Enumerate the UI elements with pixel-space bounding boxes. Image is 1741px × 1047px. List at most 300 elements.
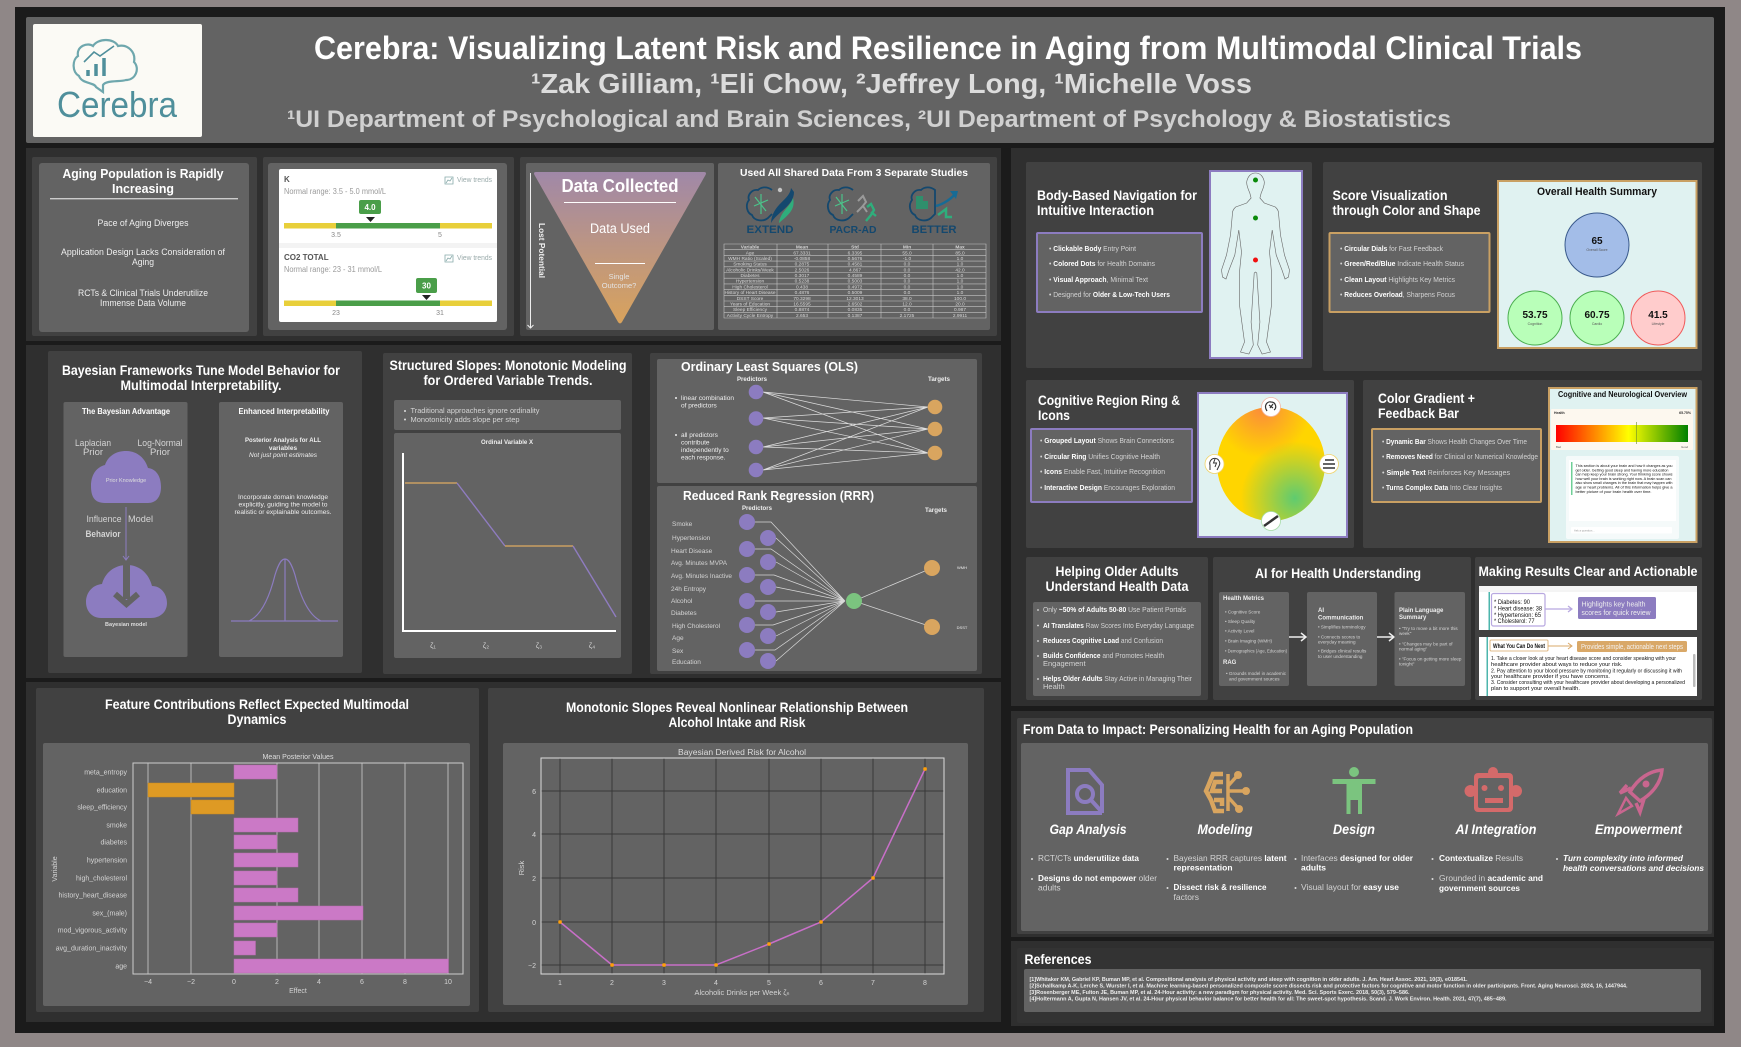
subpanel: Bayesian advantage: Prior	[150, 447, 170, 458]
text block: Immense Data Volume	[100, 298, 186, 308]
text block: Helps Older Adults Stay Active in Managing Their	[1043, 674, 1192, 683]
panel: body navigation: Intuitive Interaction	[1037, 202, 1154, 218]
data table: Mean	[796, 245, 808, 251]
data table: 2.653	[796, 313, 808, 319]
line chart: 3	[662, 980, 666, 987]
text block: Builds Confidence and Promotes Health	[1043, 651, 1164, 660]
column: empowerment: Turn complexity into informed	[1563, 853, 1684, 863]
subpanel: RRR: WMH	[957, 565, 967, 570]
data table: 55.0	[902, 250, 912, 256]
data table: 12.3013	[846, 296, 864, 302]
bar chart: sex_(male)	[92, 910, 127, 918]
data table: 0.5676	[848, 256, 863, 262]
bar chart: smoke	[106, 822, 127, 830]
data table: Age	[746, 250, 755, 256]
data table: 42.0	[955, 267, 965, 273]
subpanel: Bayesian advantage: Log-Normal	[138, 438, 182, 449]
text block: • Grouped Layout Shows Brain Connections	[1040, 436, 1174, 445]
bar chart: 6	[360, 979, 364, 986]
column: modeling	[1166, 771, 1287, 902]
column: modeling: Dissect risk & resilience	[1174, 882, 1267, 892]
data table: 0.5009	[848, 290, 863, 296]
heading: Bayesian Frameworks Tune Model Behavior for	[62, 362, 340, 378]
box: AI communication: to user understanding	[1318, 654, 1363, 659]
subpanel: RRR: Age	[672, 635, 684, 642]
dials: overall health summary: 65	[1591, 236, 1603, 247]
icon: rocket	[1618, 770, 1662, 814]
data table: 0.0	[904, 290, 911, 296]
panel: body navigation	[1026, 162, 1312, 368]
funnel: Single	[609, 272, 629, 281]
text block: • Simple Text Reinforces Key Messages	[1382, 468, 1510, 477]
panel: AI understanding: AI for Health Understanding	[1255, 565, 1421, 581]
panel: structured slopes: for Ordered Variable Trends.	[424, 372, 592, 388]
column: gap analysis: Gap Analysis	[1050, 821, 1127, 837]
card: key scores: * Cholesterol: 77	[1494, 618, 1535, 625]
dials: overall health summary	[1498, 181, 1696, 348]
data table: 38.0	[902, 296, 912, 302]
data table: History of Heart Disease	[724, 290, 776, 296]
logo: BETTER	[910, 187, 958, 236]
panel: feature contributions	[36, 688, 479, 1012]
column: empowerment: Empowerment	[1595, 821, 1683, 837]
line chart: 0	[532, 920, 536, 927]
column: AI integration: government sources	[1439, 883, 1520, 893]
box: health metrics: RAG	[1223, 660, 1237, 666]
line chart: Alcoholic Drinks per Week ζₙ	[694, 988, 790, 997]
text block: Application Design Lacks Consideration of	[61, 247, 225, 257]
studies and table	[718, 163, 990, 330]
subpanel: OLS: each response.	[681, 454, 726, 462]
panel: cognitive region ring	[1026, 380, 1354, 548]
text block: • Interactive Design Encourages Exploration	[1040, 483, 1175, 492]
box: plain language summary: week"	[1399, 631, 1412, 636]
text block: • Dynamic Bar Shows Health Changes Over Time	[1382, 437, 1527, 446]
bar chart: 10	[444, 979, 452, 986]
box: plain language summary	[1394, 592, 1465, 686]
gauge: CO2: Normal range: 23 - 31 mmol/L	[284, 265, 383, 274]
subpanel: RRR: Diabetes	[671, 610, 697, 617]
bar chart: hypertension	[87, 858, 127, 864]
text block: Pace of Aging Diverges	[98, 218, 189, 228]
text block: • Designed for Older & Low-Tech Users	[1049, 290, 1170, 299]
text block: Health	[1043, 682, 1065, 691]
icon: cloud Bayesian model	[86, 565, 167, 628]
box: health metrics: and government sources	[1229, 676, 1280, 682]
text block	[1031, 429, 1192, 502]
chat summary: also show small changes in the brain that may happen with	[1576, 481, 1672, 485]
logo: BETTER: BETTER	[912, 224, 957, 236]
column: gap analysis: RCT/CTs underutilize data	[1038, 853, 1139, 863]
gauge: CO2: 30	[422, 282, 431, 290]
column: gap analysis: Designs do not empower older	[1038, 873, 1157, 883]
text block: • Clean Layout Highlights Key Metrics	[1340, 275, 1455, 284]
image: neuro overview: Cognitive and Neurological Overview	[1558, 390, 1688, 399]
card: key scores: scores for quick review	[1582, 608, 1651, 617]
subpanel: RRR: Education	[672, 659, 701, 666]
subpanel: enhanced interpretability: Not just point estimates	[249, 452, 318, 459]
data table: Min	[903, 245, 911, 251]
panel: aging population	[32, 157, 257, 336]
line chart: 6	[819, 980, 823, 987]
subpanel: enhanced interpretability: explicitly, guiding the model to	[238, 502, 328, 508]
subpanel: enhanced interpretability: Posterior Analysis for ALL	[245, 437, 321, 444]
box: plain language summary: normal aging"	[1399, 646, 1428, 652]
data table: 0.0	[904, 284, 911, 290]
text block: Engagement	[1043, 659, 1086, 668]
text block: Reduces Cognitive Load and Confusion	[1043, 636, 1163, 645]
feedback bar: Health	[1554, 411, 1565, 415]
data table: Diabetes	[741, 273, 760, 279]
column: AI integration: AI Integration	[1455, 821, 1536, 837]
panel: OLS and RRR	[650, 353, 982, 674]
panel: cognitive region ring: Cognitive Region Ring &	[1038, 392, 1180, 408]
data table: 0.438	[796, 284, 808, 290]
icon: document magnifier	[1068, 770, 1102, 813]
feedback bar: 65.75%	[1679, 411, 1692, 415]
data table: 85.0	[955, 250, 965, 256]
text block	[1037, 233, 1202, 312]
card: next steps: 2. Pay attention to your blood pressure by monitoring it regularly or discussing it with	[1491, 668, 1682, 674]
text block: bullets: Traditional approaches ignore ordinality	[410, 406, 540, 415]
subpanel: enhanced interpretability: realistic or explainable outcomes.	[234, 509, 332, 516]
panel: helping older adults: Understand Health Data	[1046, 578, 1189, 594]
text block: • Colored Dots for Health Domains	[1049, 259, 1155, 268]
box: plain language summary: • "Changes may be part of	[1399, 642, 1453, 646]
arrow	[1377, 633, 1394, 641]
bar chart: history_heart_disease	[58, 892, 127, 900]
box: plain language summary: tonight"	[1399, 662, 1415, 666]
line chart: 7	[871, 980, 875, 987]
data table: 6.3395	[848, 250, 863, 256]
box: AI communication: • Simplifies terminology	[1318, 624, 1366, 630]
text block: • Icons Enable Fast, Intuitive Recognition	[1040, 467, 1165, 476]
gauge: K: 3.5	[331, 232, 341, 239]
box: health metrics	[1219, 592, 1289, 686]
chart: bell curve	[231, 559, 338, 621]
gauge: CO2	[284, 253, 492, 317]
column: design: adults	[1301, 862, 1326, 872]
arrow	[1289, 633, 1306, 641]
logo	[33, 24, 202, 137]
panel: references	[1011, 941, 1714, 1026]
text block: citations: [3]Rosenberger ME, Fulton JE, Buman MP, et al. 24-Hour activity: a new paradigm for physical activity. Med. Sci. Sports Exerc. 2018, 50(3), 579–586.	[1030, 990, 1410, 996]
subpanel: RRR: Heart Disease	[671, 548, 713, 555]
data table: WMH Ratio (Scaled)	[728, 256, 772, 262]
card: key scores	[1479, 586, 1697, 630]
data table: 0.0	[904, 279, 911, 285]
column: modeling: Bayesian RRR captures latent	[1174, 853, 1287, 863]
heading: Multimodal Interpretability.	[120, 377, 282, 393]
line chart	[503, 743, 968, 1005]
authors: ¹Zak Gilliam, ¹Eli Chow, ²Jeffrey Long, ¹Michelle Voss	[531, 68, 1252, 99]
box: health metrics: • Cognitive Score	[1225, 610, 1261, 614]
funnel: Outcome?	[602, 281, 636, 290]
gauge: CO2: View trends	[457, 255, 492, 262]
subpanel: RRR	[657, 486, 977, 671]
header panel	[26, 17, 1714, 143]
data table: 12.0	[902, 302, 912, 308]
subpanel: OLS: Targets	[928, 376, 950, 383]
chat summary: get older. Getting good sleep and having more education	[1576, 468, 1668, 472]
data table: Max	[955, 245, 965, 251]
data table: 0.5003	[848, 279, 863, 285]
title: Cerebra: Visualizing Latent Risk and Resilience in Aging from Multimodal Clinical Trials	[314, 30, 1582, 66]
gauge: K: 4.0	[364, 203, 376, 212]
subpanel: OLS: linear combination	[681, 395, 734, 402]
panel: monotonic slopes: Alcohol Intake and Risk	[668, 714, 806, 730]
card: next steps: Provides simple, actionable next steps	[1581, 644, 1683, 651]
box: plain language summary: Summary	[1399, 615, 1427, 621]
data table: 2.9911	[953, 313, 967, 319]
line chart: 4	[714, 980, 718, 987]
bar chart: education	[97, 788, 127, 794]
bar chart	[43, 743, 470, 1006]
column: modeling: factors	[1174, 892, 1199, 902]
data table: -1.0	[903, 256, 911, 262]
text block: citations: [4]Holtermann A, Gupta N, Hansen JV, et al. 24-Hour physical behavior balance for better health for all: The sweet-spot hypothesis. Scand. J. Work Environ. Health. 2021, 47(7), 485–489.	[1030, 996, 1507, 1002]
bar chart: −4	[144, 979, 152, 986]
chat summary: This section is about your brain and how it changes as you	[1576, 464, 1672, 468]
data table: -0.0858	[794, 256, 810, 262]
column: AI integration: Contextualize Results	[1439, 853, 1523, 863]
subpanel: RRR: Reduced Rank Regression (RRR)	[683, 488, 874, 503]
gauge: CO2: 23	[332, 310, 340, 317]
data table: 0.0	[904, 273, 911, 279]
bar chart: Mean Posterior Values	[262, 752, 334, 761]
text block	[1372, 429, 1541, 502]
text block: • Removes Need for Clinical or Numerical Knowledge	[1382, 452, 1538, 461]
heading	[62, 362, 340, 393]
text block: • Visual Approach, Minimal Text	[1049, 275, 1149, 284]
panel: helping older adults: Helping Older Adults	[1056, 563, 1179, 579]
gauge: K	[284, 175, 492, 239]
text block	[1330, 233, 1490, 312]
data table: 70.3298	[793, 296, 811, 302]
line chart: 5	[767, 980, 771, 987]
data table: 0.987	[954, 307, 966, 313]
subpanel: RRR: Hypertension	[672, 535, 711, 542]
card: key scores: * Heart disease: 38	[1494, 606, 1542, 612]
chat summary: Ask a question...	[1574, 528, 1595, 532]
column: empowerment	[1556, 770, 1704, 873]
panel: helping older adults	[1026, 557, 1208, 700]
affiliations: ¹UI Department of Psychological and Brain Sciences, ²UI Department of Psychology & Biostatistics	[287, 106, 1451, 133]
group: results row	[26, 682, 1001, 1022]
data table: 67.3331	[793, 250, 811, 256]
box: health metrics: • Brain Imaging (WMH)	[1225, 638, 1273, 644]
panel: score visualization: through Color and Shape	[1332, 202, 1481, 218]
data table: 0.3017	[795, 273, 810, 279]
icon: person	[1332, 767, 1376, 814]
box: health metrics: Health Metrics	[1223, 596, 1265, 602]
data table: Activity Cycle Entropy	[727, 313, 774, 319]
logo: PACR-AD: PACR-AD	[830, 224, 877, 236]
subpanel: RRR: Alcohol	[671, 598, 693, 605]
chart: ordinal variable: Ordinal Variable X	[481, 439, 534, 446]
panel: color gradient feedback	[1363, 380, 1702, 548]
panel: color gradient feedback: Feedback Bar	[1378, 405, 1459, 421]
data table: 2.6502	[848, 302, 863, 308]
subpanel: enhanced interpretability: Enhanced Interpretability	[238, 406, 330, 416]
text block: Aging	[132, 257, 154, 267]
subpanel: OLS: Predictors	[737, 376, 767, 383]
icon: region bottom	[1262, 512, 1280, 530]
subpanel: RRR: Sex	[672, 648, 684, 655]
column: modeling: representation	[1174, 862, 1233, 872]
chat summary: age or heart problems. All of this information helps give a	[1576, 486, 1673, 490]
data table: Variable	[741, 245, 760, 251]
panel: structured slopes	[383, 353, 632, 674]
bar chart: high_cholesterol	[76, 876, 127, 882]
heading: From Data to Impact: Personalizing Health for an Aging Population	[1023, 721, 1413, 737]
text block	[61, 218, 225, 308]
card: next steps	[1479, 637, 1697, 696]
text block: AI Translates Raw Scores Into Everyday Language	[1043, 621, 1194, 630]
heading: Aging Population is Rapidly	[62, 167, 224, 181]
subpanel: enhanced interpretability: variables	[269, 445, 297, 452]
subpanel: OLS: of predictors	[681, 402, 718, 410]
dials: overall health summary: Overall Health Summary	[1537, 186, 1658, 198]
data table: Hypertension	[736, 279, 764, 285]
bar chart: Variable	[52, 856, 59, 882]
group: top left row	[26, 148, 1001, 341]
group: methods row	[26, 345, 1001, 678]
data table: 1.0	[957, 290, 964, 296]
card: next steps: 3. Consider consulting with your healthcare provider about developing a personalized	[1491, 680, 1685, 686]
panel: clear and actionable: Making Results Clear and Actionable	[1478, 563, 1698, 579]
box: health metrics: • Grounds model in academic	[1226, 671, 1287, 676]
text block: • Turns Complex Data Into Clear Insights	[1382, 483, 1502, 492]
box: AI communication	[1307, 592, 1377, 686]
panel: references: References	[1024, 951, 1092, 967]
icon: brain circuit	[1206, 771, 1250, 813]
text block: RCTs & Clinical Trials Underutilize	[78, 288, 208, 298]
subpanel: OLS: all predictors	[681, 432, 719, 439]
column: gap analysis: adults	[1038, 882, 1061, 892]
dials: overall health summary: 53.75	[1522, 310, 1548, 321]
line chart: Risk	[517, 860, 526, 875]
line chart: 2	[610, 980, 614, 987]
panel: lab gauges	[263, 157, 514, 336]
data table: 0.0	[904, 262, 911, 268]
column: design	[1294, 767, 1414, 892]
data table: DSST Score	[737, 296, 764, 302]
data table: Sleep Efficiency	[733, 307, 768, 313]
column: design: Design	[1333, 821, 1375, 837]
card: next steps: plan to support your overall health.	[1491, 686, 1580, 692]
chat summary	[1566, 456, 1679, 539]
bar chart: 2	[275, 979, 279, 986]
card: next steps: 1. Take a closer look at your heart disease score and consider speaking with your	[1491, 656, 1676, 662]
bar chart: avg_duration_inactivity	[56, 946, 127, 952]
panel: monotonic slopes: Monotonic Slopes Reveal Nonlinear Relationship Between	[566, 699, 908, 715]
data table: 0.1387	[848, 313, 863, 319]
arrow	[123, 507, 129, 560]
panel: Bayesian frameworks	[48, 351, 362, 673]
line chart: 2	[532, 876, 536, 883]
panel: data funnel and studies	[520, 157, 997, 336]
bar chart: mod_vigorous_activity	[58, 928, 127, 934]
column: gap analysis	[1031, 770, 1157, 892]
feedback bar: Good	[1681, 445, 1688, 449]
box: AI communication: • Bridges clinical results	[1318, 648, 1367, 654]
logo: EXTEND	[746, 187, 794, 236]
chart: ordinal variable: ζ₄	[589, 641, 595, 650]
icon: region top	[1262, 398, 1280, 416]
card: key scores: Highlights key health	[1582, 600, 1646, 608]
logo: EXTEND: EXTEND	[746, 224, 794, 236]
chart: ordinal variable: ζ₃	[536, 641, 542, 650]
card: next steps: your healthcare provider if you have concerns.	[1491, 674, 1610, 680]
bar chart: 4	[317, 979, 321, 986]
text block: • Circular Dials for Fast Feedback	[1340, 244, 1443, 253]
subpanel: RRR: Avg. Minutes Inactive	[671, 573, 732, 580]
gauge: K: K	[284, 175, 290, 184]
text block: bullets: Monotonicity adds slope per step	[410, 415, 520, 424]
box: health metrics: • Sleep Quality	[1225, 619, 1256, 624]
data table: 16.5595	[793, 302, 811, 308]
subpanel: enhanced interpretability: Incorporate domain knowledge	[238, 494, 328, 501]
text block: bullets	[394, 400, 621, 430]
data table: 0.0835	[848, 307, 863, 313]
chat summary: can help keep your brain strong. Your thinking score shows	[1576, 473, 1673, 477]
dials: overall health summary: Cognition	[1528, 322, 1542, 326]
data table: 1.0	[957, 256, 964, 262]
gauge: K: 5	[438, 232, 442, 239]
subpanel: Bayesian advantage: Influence	[86, 514, 122, 525]
data table: Std	[851, 245, 859, 251]
gauge: CO2: CO2 TOTAL	[284, 253, 329, 262]
panel: monotonic slopes	[488, 688, 984, 1012]
card: next steps: healthcare provider about ways to reduce your risk.	[1491, 662, 1623, 668]
image: body map	[1210, 171, 1302, 358]
subpanel: OLS: contribute	[681, 440, 710, 446]
feedback bar	[1551, 409, 1693, 450]
text block: citations: [1]Whitaker KM, Gabriel KP, Buman MP, et al. Compositional analysis of physical activity and sleep with cognition in older adults. J. Am. Heart Assoc. 2021, 10(3), e018541.	[1030, 977, 1468, 983]
data table: 0.4972	[848, 284, 863, 290]
dials: overall health summary: Lifestyle	[1652, 322, 1664, 326]
text block: citations	[1030, 977, 1628, 1002]
data table: 2.1725	[900, 313, 915, 319]
subpanel: RRR: Smoke	[672, 521, 693, 528]
line chart: 4	[532, 832, 536, 839]
box: plain language summary: • "Focus on getting more sleep	[1399, 656, 1462, 662]
text block: citations: [2]Schallkamp A-K, Lerche S, Wurster I, et al. Machine learning-based personalized composite score dissects risk and protective factors for cognitive and motor function in older participants. Front. Aging Neurosci. 2024, 16, 1447944.	[1030, 984, 1628, 990]
data table: 1.0	[957, 262, 964, 268]
subpanel: Bayesian advantage: Laplacian	[75, 438, 111, 449]
subpanel: RRR: 24h Entropy	[671, 586, 707, 593]
panel: clear and actionable	[1475, 557, 1702, 700]
card: key scores: * Hypertension: 65	[1494, 612, 1541, 619]
subpanel: enhanced interpretability	[219, 402, 343, 657]
data table: 0.0	[904, 307, 911, 313]
data table: 1.0	[957, 279, 964, 285]
data table: 0.2875	[795, 262, 810, 268]
chart: ordinal variable: ζ₂	[483, 641, 489, 650]
text block	[1033, 602, 1201, 696]
icon: cloud Bayesian model: Bayesian model	[105, 622, 147, 628]
card: next steps: What You Can Do Next	[1493, 644, 1545, 650]
data table: 0.0	[904, 267, 911, 273]
subpanel: RRR: Avg. Minutes MVPA	[671, 560, 728, 567]
subpanel: Bayesian advantage: The Bayesian Advantage	[82, 406, 170, 416]
bar chart: −2	[187, 979, 195, 986]
icon: cloud prior knowledge	[91, 451, 161, 503]
panel: feature contributions: Dynamics	[228, 711, 287, 727]
dials: overall health summary: Cardio	[1592, 322, 1602, 326]
text block: • Clickable Body Entry Point	[1049, 244, 1137, 253]
